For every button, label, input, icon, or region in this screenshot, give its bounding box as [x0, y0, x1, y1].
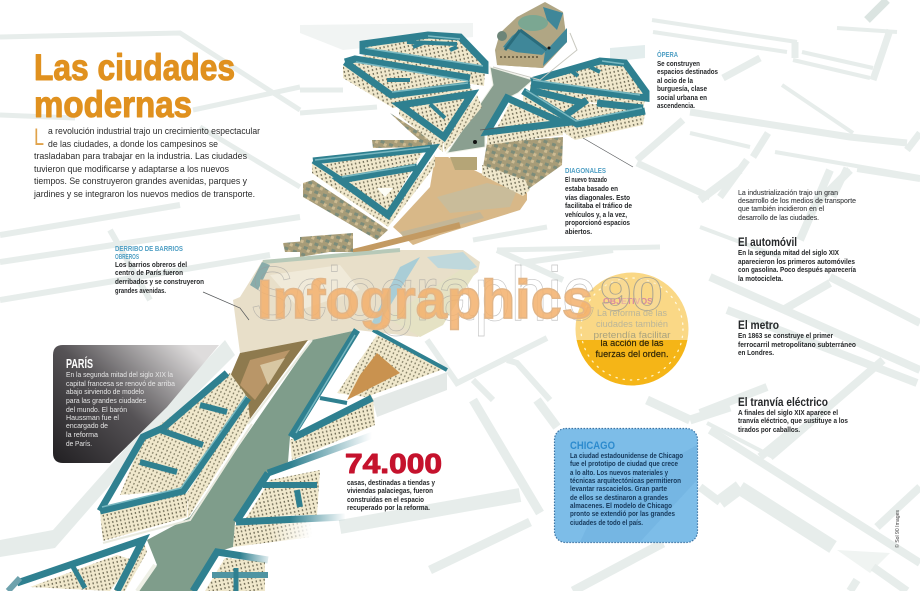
text: Chicago body: a lo alto. Los nuevos materiales y [570, 468, 669, 477]
annotation: diagonales: abiertos. [565, 227, 592, 236]
text block: el tranvía eléctrico: tranvía eléctrico, que sustituye a los [738, 416, 848, 425]
annotation: ópera: ascendencia. [657, 101, 695, 110]
text: Chicago body: de ellos se destinaron a grandes [570, 493, 668, 502]
intro text block: tiempos. Se construyeron grandes avenidas, parques y [34, 176, 247, 187]
intro text block: tuvieron que modificarse y adaptarse a los nuevos [34, 164, 229, 175]
text: Chicago body: almacenes. El modelo de Chicago [570, 501, 672, 510]
annotation: ópera [657, 50, 718, 110]
callout: objetivos upper text: La reforma de las [597, 308, 667, 318]
annotation: diagonales: facilitaba el tráfico de [565, 201, 632, 210]
block: block with fading roof [233, 435, 373, 547]
annotation: ópera: al ocio de la [657, 76, 694, 85]
text block: el metro: en Londres. [738, 348, 774, 357]
annotation: ópera: social urbana en [657, 93, 707, 102]
annotation: diagonales: vehículos y, a la vez, [565, 210, 627, 219]
block: bottom-left block [8, 540, 155, 591]
illustration: washed-out central block under watermark [233, 250, 480, 353]
annotation: diagonales: estaba basado en [565, 184, 618, 193]
annotation: ópera: burguesía, clase [657, 84, 707, 93]
text block: transport intro [738, 188, 856, 222]
block: north-east lower [523, 90, 645, 140]
callout lines [203, 127, 633, 320]
text: París body: capital francesa se renovó de arriba [66, 379, 176, 388]
annotation: diagonales: proporcionó espacios [565, 218, 630, 227]
heading: Chicago: CHICAGO [570, 440, 615, 452]
watermark band over circle [566, 268, 694, 340]
text: Chicago body: levantar rascacielos. Gran parte [570, 484, 667, 493]
old buildings beside avenue [220, 340, 312, 424]
text block: transport intro: desarrollo de los medios de transporte [738, 196, 856, 205]
illustration: Opera quarter, upper blocks [283, 2, 646, 257]
drop cap: L [34, 124, 44, 151]
text: Chicago body: técnicas arquitectónicas permitieron [570, 476, 681, 485]
callout: objetivos circle: fuerzas del orden. [596, 349, 668, 359]
text: París body: la reforma [66, 430, 99, 439]
callout: objetivos upper text: ciudades también [596, 319, 668, 329]
annotation: ópera: Se construyen [657, 59, 700, 68]
statistic: 74.000: casas, destinadas a tiendas y [347, 478, 436, 487]
text: París body: para las grandes ciudades [66, 396, 146, 405]
statistic: 74.000 [345, 448, 442, 512]
illustration: Opera house [493, 2, 577, 80]
statistic: 74.000: construidas en el espacio [347, 495, 424, 504]
annotation: derribo de barrios obreros: OBREROS [115, 252, 139, 261]
sand demolition area [393, 157, 527, 245]
intro text block: a revolución industrial trajo un crecimiento espectacular [48, 126, 260, 137]
street and strips of old buildings [283, 113, 563, 257]
title: Las ciudades [34, 47, 235, 88]
annotation: derribo de barrios obreros: DERRIBO DE BARRIOS [115, 244, 183, 253]
block: bottom centre block [193, 552, 268, 591]
text block: el automóvil: con gasolina. Poco después aparecería [738, 265, 857, 274]
text block: transport intro: desarrollo de las ciudades. [738, 213, 819, 222]
block: triangular block right of avenue [290, 330, 447, 460]
text: París body: En la segunda mitad del siglo XIX la [66, 370, 174, 379]
watermark: Infographics [257, 268, 593, 330]
block: small triangular by avenue [473, 98, 563, 145]
panel: París [53, 345, 219, 463]
text block: el metro: El metro [738, 320, 779, 332]
text block: transport intro: La industrialización trajo un gran [738, 188, 838, 197]
watermark: 90 [600, 268, 663, 320]
text block: el metro: En 1863 se construye el primer [738, 331, 833, 340]
callout: objetivos circle [576, 272, 688, 386]
panel: Chicago [554, 428, 698, 542]
block: north-west upper [360, 33, 485, 86]
callout: objetivos upper text: OBJETIVOS [603, 297, 654, 306]
text block: el tranvía eléctrico: tirados por caballos. [738, 425, 800, 434]
text block: el automóvil: El automóvil [738, 237, 797, 249]
text: París body [66, 370, 176, 448]
intro text block: de las ciudades, a donde los campesinos se [48, 139, 218, 150]
text: Chicago body: ciudades de todo el país. [570, 518, 643, 527]
block: west triangular [312, 147, 435, 227]
statistic: 74.000: recuperado por la reforma. [347, 503, 430, 512]
heading: París: PARÍS [66, 356, 93, 371]
statistic: 74.000: viviendas palaciegas, fueron [347, 486, 433, 495]
block: large block left of avenue [100, 373, 252, 543]
annotation: ópera: espacios destinados [657, 67, 718, 76]
text block: el metro [738, 320, 856, 357]
text: Chicago body: pronto se extendió por las grandes [570, 509, 675, 518]
statistic: 74.000: 74.000 [345, 448, 442, 479]
annotation: derribo de barrios obreros: Los barrios obreros del [115, 260, 187, 269]
text block: el tranvía eléctrico: A finales del siglo XIX aparece el [738, 408, 838, 417]
avenue junction [447, 67, 533, 153]
intro text block: jardines y se integraron los nuevos medios de transporte. [33, 189, 255, 200]
text: Chicago body [570, 451, 683, 527]
title [34, 47, 235, 125]
image credit: © Sol 90 Images [894, 509, 901, 548]
text block: el metro: ferrocarril metropolitano subterráneo [738, 340, 856, 349]
text: París body: abajo sirviendo de modelo [66, 387, 144, 396]
text: París body: de París. [66, 439, 92, 448]
annotation: derribo de barrios obreros: grandes avenidas. [115, 286, 166, 295]
annotation: derribo de barrios obreros: centro de París fueron [115, 268, 183, 277]
text block: el automóvil: En la segunda mitad del siglo XIX [738, 248, 839, 257]
callout: objetivos circle: la acción de las [600, 338, 664, 348]
intro text block [33, 124, 260, 200]
text block: el automóvil [738, 237, 857, 283]
text: Chicago body: La ciudad estadounidense de Chicago [570, 451, 683, 460]
annotation: diagonales [565, 166, 632, 236]
callout: objetivos upper text [594, 297, 670, 340]
text: París body: encargado de [66, 421, 108, 430]
annotation: ópera: ÓPERA [657, 50, 679, 59]
text block: el automóvil: aparecieron los primeros automóviles [738, 257, 855, 266]
illustration: lower blocks [8, 330, 447, 591]
annotation: diagonales: vías diagonales. Esto [565, 193, 630, 202]
text block: el automóvil: la motocicleta. [738, 274, 783, 283]
annotation: diagonales: DIAGONALES [565, 166, 606, 175]
text block: el tranvía eléctrico [738, 397, 848, 434]
illustration: lower avenue [137, 330, 357, 591]
text block: transport intro: que también incidieron en el [738, 204, 824, 213]
text block: el tranvía eléctrico: El tranvía eléctrico [738, 397, 828, 409]
text: París body: Haussman fue el [66, 413, 119, 422]
annotation: derribo de barrios obreros: derribados y se construyeron [115, 277, 204, 286]
block: centre triangular [399, 93, 482, 152]
block: north-east upper [530, 61, 646, 110]
intro text block: trasladaban para trabajar en la industria. Las ciudades [34, 151, 247, 162]
text: París body: del mundo. El barón [66, 405, 127, 414]
title: modernas [34, 84, 192, 125]
callout: objetivos upper text: pretendía facilitar [594, 330, 670, 340]
text: Chicago body: fue el prototipo de ciudad que crece [570, 459, 678, 468]
block: north-west lower [343, 57, 473, 108]
watermark: Sciographic [250, 252, 595, 337]
annotation: diagonales: El nuevo trazado [565, 175, 607, 184]
annotation: derribo de barrios obreros [115, 244, 204, 295]
